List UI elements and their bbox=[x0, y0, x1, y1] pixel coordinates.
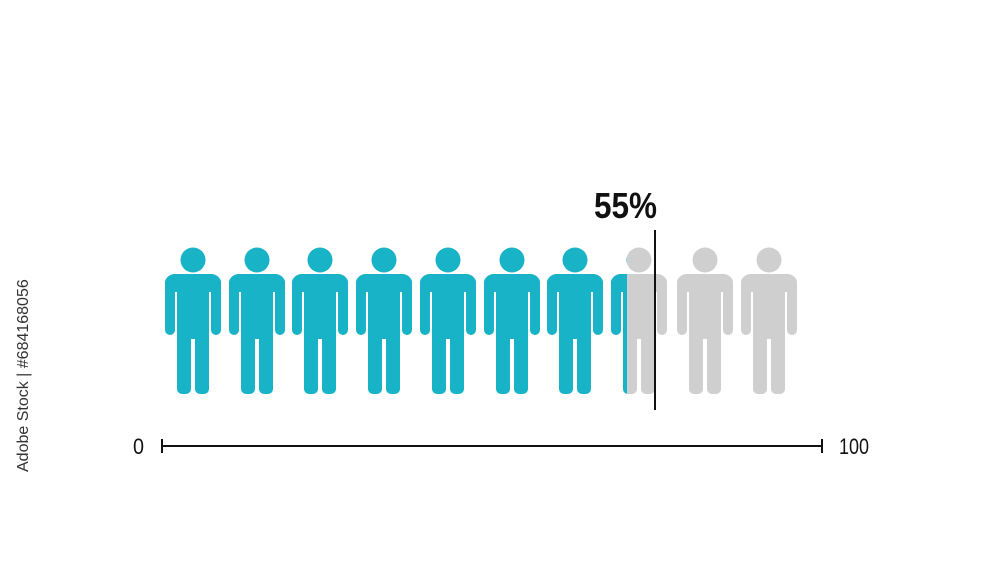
grey figures bbox=[677, 248, 797, 394]
axis bbox=[162, 439, 822, 453]
axis label 0: 0 bbox=[133, 434, 144, 459]
percentage label: 55% bbox=[594, 185, 657, 226]
partial figure bbox=[611, 248, 667, 394]
teal figures bbox=[165, 248, 603, 394]
watermark text: Adobe Stock | #684168056 bbox=[15, 279, 32, 472]
figures row bbox=[165, 248, 797, 394]
axis label 100: 100 bbox=[839, 434, 869, 459]
marker line bbox=[654, 230, 656, 410]
